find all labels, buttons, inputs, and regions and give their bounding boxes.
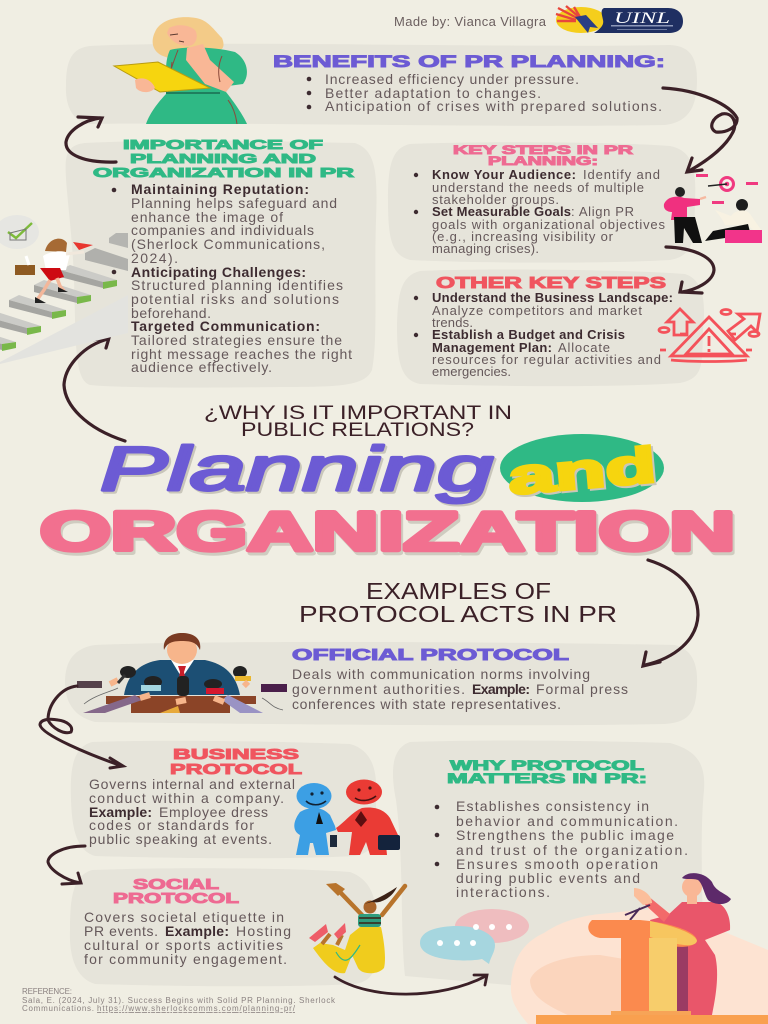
arrow: benefits to key steps: [663, 88, 737, 172]
heading: why is it important: PUBLIC RELATIONS?: [241, 420, 474, 441]
text block: social protocol: Hosting: [236, 923, 291, 939]
icon: team and target: [664, 174, 762, 243]
heading: why protocol matters: [447, 758, 647, 786]
icon: woman climbing stairs: [0, 215, 128, 364]
text block: social protocol: PR events.: [84, 923, 158, 939]
heading: social protocol: PROTOCOL: [113, 891, 239, 907]
icon: warning triangle with arrows: [659, 309, 760, 362]
text block: importance list: enhance the image of: [131, 209, 283, 225]
text block: other key steps list: Management Plan:: [432, 340, 552, 355]
heading: key steps: KEY STEPS IN PR: [453, 143, 634, 157]
icon: jumping woman: [309, 883, 405, 973]
logo: UINL: UINL: [614, 10, 670, 27]
text block: other key steps list: resources for regular activities and: [432, 352, 661, 367]
text block: why protocol list: during public events and: [456, 870, 640, 886]
text block: social protocol: Example:: [165, 923, 229, 939]
text block: key steps list: stakeholder groups.: [432, 192, 559, 207]
panel: why protocol matters background: [393, 740, 704, 986]
text block: key steps list: goals with organizational objectives: [432, 217, 666, 232]
heading: why is it important: ¿WHY IS IT IMPORTANT IN: [204, 403, 512, 424]
text block: key steps list: : Align PR: [571, 204, 634, 219]
arrow: importance to benefits: [66, 117, 116, 162]
text block: social protocol: Covers societal etiquette in: [84, 909, 284, 925]
text block: business protocol: codes or standards for: [89, 817, 254, 833]
heading: business protocol: BUSINESS: [173, 747, 300, 763]
heading: social protocol: SOCIAL: [133, 877, 219, 893]
text block: reference: Communications.: [22, 1004, 94, 1013]
text block: benefits list: Anticipation of crises with prepared solutions.: [325, 98, 662, 114]
text block: key steps list: (e.g., increasing visibility or: [432, 229, 614, 244]
text block: reference: Sala, E. (2024, July 31). Success Begins with Solid PR Planning. Sherlock: [22, 996, 336, 1005]
text block: key steps list: managing crises).: [432, 241, 539, 256]
text block: other key steps list: emergencies.: [432, 364, 511, 379]
text block: business protocol: public speaking at events.: [89, 831, 272, 847]
heading: social protocol: [113, 877, 239, 907]
heading: why protocol matters: MATTERS IN PR:: [447, 771, 647, 786]
text block: why protocol list: interactions.: [456, 884, 550, 900]
title: ORGANIZATION: ORGANIZATION: [40, 500, 735, 562]
title: ORGANIZATION: [40, 500, 737, 565]
title: ORGANIZATION: ORGANIZATION: [42, 503, 737, 565]
text block: importance list: [112, 181, 352, 375]
panel: benefits background: [66, 44, 697, 126]
heading: business protocol: [170, 747, 302, 778]
text block: business protocol: Governs internal and external: [89, 776, 295, 792]
text block: importance list: companies and individuals: [131, 222, 314, 238]
text block: importance list: (Sherlock Communications,: [131, 236, 325, 252]
panel: official protocol background: [65, 642, 697, 725]
title: Planning: Planning: [102, 437, 495, 506]
text block: official protocol: government authorities.: [292, 681, 465, 697]
illustration: speaker at podium: [511, 873, 768, 1024]
text block: official protocol: Formal press: [536, 681, 628, 697]
arrow: social to why protocol: [335, 975, 487, 994]
logo: UINL: [556, 6, 683, 33]
heading: examples of protocol acts: PROTOCOL ACTS IN PR: [299, 601, 617, 627]
icon: press conference speaker: [77, 633, 287, 713]
text block: benefits list: [307, 71, 662, 114]
heading: benefits: BENEFITS OF PR PLANNING:: [273, 53, 665, 71]
title: and badge: [500, 434, 664, 507]
arrow: key steps to other key steps: [666, 247, 714, 293]
panel: other key steps background: [397, 270, 704, 386]
text block: importance list: 2024).: [131, 250, 178, 266]
text block: other key steps list: Analyze competitors and market: [432, 303, 642, 318]
text block: why protocol list: [435, 798, 688, 900]
text block: other key steps list: trends.: [432, 315, 473, 330]
text block: business protocol: [89, 776, 295, 847]
heading: official protocol: OFFICIAL PROTOCOL: [292, 647, 569, 664]
text block: official protocol: conferences with state representatives.: [292, 696, 561, 712]
text block: reference: [22, 987, 336, 1013]
text block: importance list: potential risks and solutions: [131, 291, 339, 307]
text block: importance list: Targeted Communication:: [131, 318, 320, 334]
text block: other key steps list: Allocate: [558, 340, 610, 355]
text block: why protocol list: behavior and communication.: [456, 813, 678, 829]
text block: business protocol: Example:: [89, 804, 152, 820]
text block: why protocol list: Ensures smooth operation: [456, 856, 658, 872]
text block: importance list: Anticipating Challenges:: [131, 264, 306, 280]
text block: key steps list: Identify and: [583, 167, 660, 182]
text block: importance list: Planning helps safeguard and: [131, 195, 337, 211]
heading: why protocol matters: WHY PROTOCOL: [450, 758, 644, 773]
arrow: examples to official: [643, 560, 698, 666]
icon: handshake figures: [294, 780, 400, 855]
heading: key steps: PLANNING:: [488, 154, 598, 168]
text block: social protocol: cultural or sports activities: [84, 937, 283, 953]
text block: key steps list: understand the needs of multiple: [432, 180, 644, 195]
text block: social protocol: [84, 909, 291, 967]
text block: importance list: Structured planning identifies: [131, 277, 343, 293]
text block: importance list: beforehand.: [131, 305, 211, 321]
text block: importance list: right message reaches the right: [131, 346, 352, 362]
text block: importance list: audience effectively.: [131, 359, 272, 375]
text block: reference: https://www.sherlockcomms.com/planning-pr/: [97, 1004, 296, 1013]
title: Planning: [100, 435, 495, 506]
text block: other key steps list: Understand the Business Landscape:: [432, 290, 673, 305]
panel: importance background: [66, 141, 377, 388]
credit: made by: Made by: Vianca Villagra: [394, 14, 547, 29]
text block: social protocol: for community engagement.: [84, 951, 287, 967]
icon: speech bubbles: [420, 909, 529, 964]
heading: importance: ORGANIZATION IN PR: [93, 165, 355, 180]
text block: business protocol: conduct within a company.: [89, 790, 284, 806]
arrow: business to social: [48, 846, 85, 884]
heading: importance: [93, 137, 355, 180]
text block: key steps list: [414, 167, 666, 256]
heading: business protocol: PROTOCOL: [170, 762, 302, 778]
text block: official protocol: [292, 666, 628, 712]
heading: importance: PLANNING AND: [130, 151, 316, 166]
heading: why is it important: [204, 403, 512, 441]
text block: business protocol: Employee dress: [159, 804, 268, 820]
text block: official protocol: Example:: [472, 681, 530, 697]
icon: woman with clipboard: [114, 17, 247, 124]
heading: examples of protocol acts: EXAMPLES OF: [366, 578, 551, 604]
panel: social protocol background: [70, 868, 376, 986]
text block: why protocol list: Establishes consistency in: [456, 798, 649, 814]
heading: importance: IMPORTANCE OF: [123, 137, 323, 152]
text block: key steps list: Know Your Audience:: [432, 167, 576, 182]
arrow: center to importance: [64, 338, 125, 441]
text block: other key steps list: [414, 290, 673, 379]
text block: official protocol: Deals with communication norms involving: [292, 666, 590, 682]
text block: benefits list: Better adaptation to changes.: [325, 85, 541, 101]
text block: other key steps list: Establish a Budget and Crisis: [432, 327, 625, 342]
text block: why protocol list: Strengthens the public image: [456, 827, 674, 843]
text block: key steps list: Set Measurable Goals: [432, 204, 571, 219]
title: Planning: Planning: [100, 435, 493, 504]
text block: why protocol list: and trust of the organization.: [456, 842, 688, 858]
title: and badge: and: [506, 437, 658, 505]
panel: key steps background: [388, 142, 695, 263]
heading: other key steps: OTHER KEY STEPS: [436, 275, 666, 292]
text block: importance list: Maintaining Reputation:: [131, 181, 309, 197]
panel: business protocol background: [71, 741, 376, 858]
arrow: official to business: [40, 686, 123, 768]
text block: reference: REFERENCE:: [22, 987, 72, 996]
heading: key steps: [453, 143, 634, 168]
text block: benefits list: Increased efficiency under pressure.: [325, 71, 579, 87]
text block: importance list: Tailored strategies ensure the: [131, 332, 342, 348]
title: and badge: and: [508, 438, 660, 507]
heading: examples of protocol acts: [299, 578, 617, 627]
